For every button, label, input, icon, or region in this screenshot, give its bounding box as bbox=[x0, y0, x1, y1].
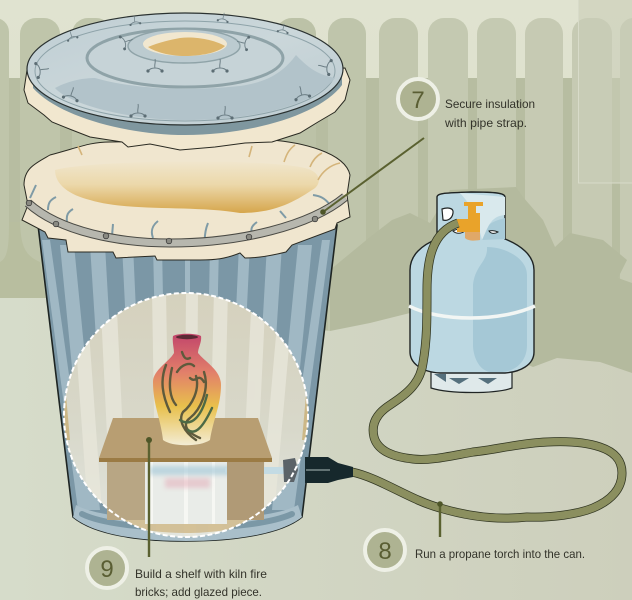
shadow left of can bbox=[0, 222, 46, 300]
step 9 callout bbox=[87, 437, 267, 599]
burner head bbox=[283, 458, 298, 482]
step 8 callout: 8 bbox=[378, 538, 392, 565]
step 9 callout: 9 bbox=[100, 556, 114, 583]
cutaway circle bbox=[63, 290, 309, 540]
shelf bbox=[99, 418, 272, 462]
ground bbox=[0, 298, 632, 600]
vase bbox=[153, 334, 221, 445]
hose nozzle bbox=[305, 457, 353, 483]
trash can body bbox=[38, 225, 337, 541]
lid opening bbox=[143, 32, 227, 56]
can liner cloth bbox=[22, 140, 350, 260]
can interior bbox=[55, 161, 319, 213]
step 7 callout: Secure insulation bbox=[445, 97, 535, 111]
brick right bbox=[227, 462, 264, 520]
lid insulation bbox=[24, 68, 350, 150]
step 7 callout: 7 bbox=[411, 87, 425, 114]
step 7 callout bbox=[320, 79, 535, 215]
step 9 callout: bricks; add glazed piece. bbox=[135, 585, 262, 599]
pipe strap bbox=[26, 197, 345, 244]
step 8 callout: Run a propane torch into the can. bbox=[415, 547, 585, 561]
lid staples bbox=[34, 12, 333, 120]
hose bbox=[352, 223, 622, 518]
step 8 callout bbox=[365, 501, 585, 570]
tank shading bbox=[473, 247, 527, 372]
fence bbox=[0, 0, 632, 400]
shadow on fence bbox=[330, 187, 632, 400]
step 7 callout: with pipe strap. bbox=[444, 116, 527, 130]
propane tank bbox=[409, 192, 535, 392]
propane valve bbox=[457, 202, 483, 232]
trash can lid bbox=[27, 12, 343, 135]
brick left bbox=[107, 462, 145, 520]
step 9 callout: Build a shelf with kiln fire bbox=[135, 567, 267, 581]
